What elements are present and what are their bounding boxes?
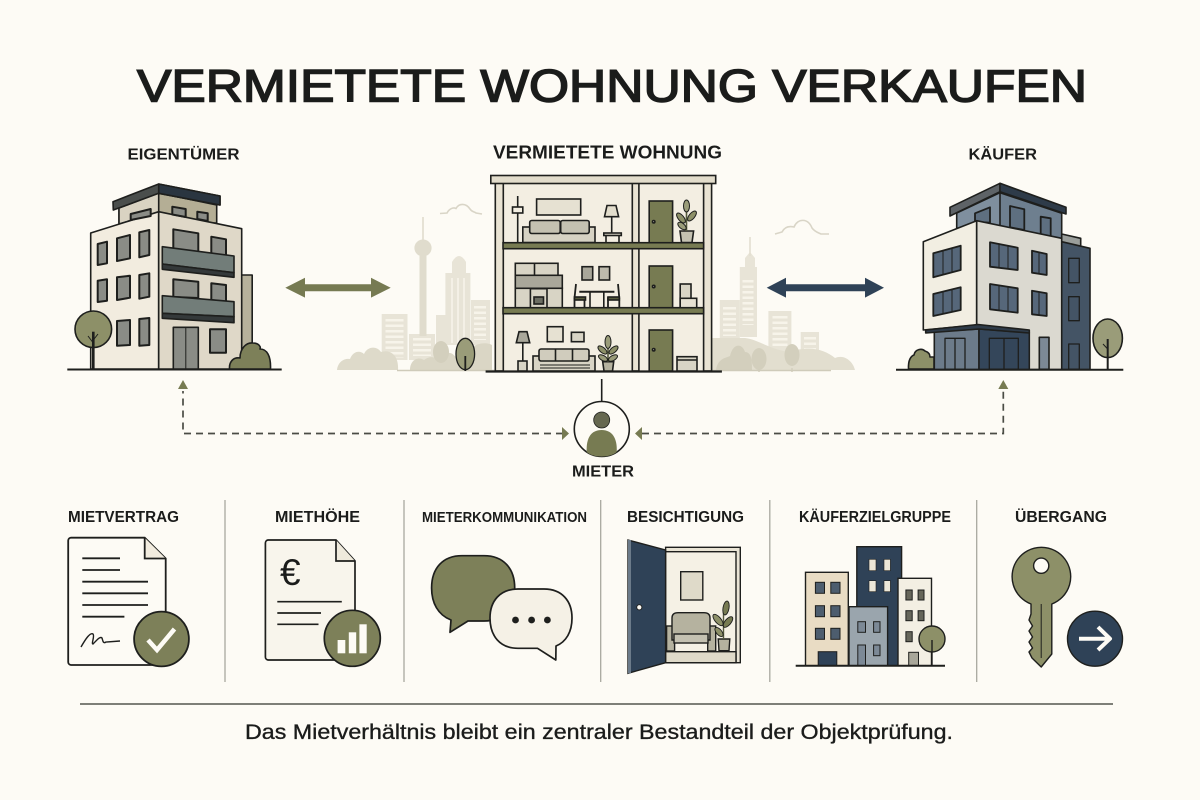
background skyline right [712,237,855,372]
heading: Käufer: KÄUFER [968,146,1037,164]
lower floor furniture [516,327,697,371]
title: VERMIETETE WOHNUNG VERKAUFEN [137,60,1087,112]
icon: rent document: € [280,552,301,593]
icon: open door with living room [628,540,740,673]
background skyline left [337,217,495,370]
central apartment cross-section [486,176,722,372]
panel: Miethöhe [265,509,380,666]
dashed connector: tenant to owner [178,380,569,440]
divider [403,500,405,682]
owner building illustration [67,184,282,370]
divider [976,500,978,682]
divider [224,500,226,682]
cloud right [775,220,829,234]
buyer building illustration [896,183,1123,370]
panel: Mietvertrag: MIETVERTRAG [68,509,179,526]
icon: key with arrow [1012,547,1122,667]
tenant icon [574,379,629,456]
footer statement: Das Mietverhältnis bleibt ein zentraler Bestandteil der Objektprüfung. [245,721,953,744]
small tree next to apartment [456,338,475,371]
panel: Besichtigung: BESICHTIGUNG [627,509,744,526]
panel: Besichtigung [627,509,744,673]
panel: Miethöhe: MIETHÖHE [275,509,360,526]
panel: Mietvertrag [68,509,189,666]
cloud left [440,204,482,214]
arrow: apartment to buyer [767,278,884,298]
divider [769,500,771,682]
label: Mieter: MIETER [572,464,634,480]
panel: Übergang: ÜBERGANG [1015,509,1107,526]
divider [80,703,1113,705]
panel: Mieterkommunikation: MIETERKOMMUNIKATION [422,510,587,526]
heading: Vermietete Wohnung: VERMIETETE WOHNUNG [493,142,722,162]
panel: Mieterkommunikation [422,510,587,660]
heading: Eigentümer: EIGENTÜMER [128,144,240,164]
panel: Käuferzielgruppe [796,509,951,666]
panel: Übergang [1012,509,1122,667]
icon: rent document [265,540,380,666]
dashed connector: tenant to buyer [635,380,1008,440]
icon: speech bubbles [432,556,572,660]
divider [600,500,602,682]
icon: city buildings [796,547,945,666]
panel: Käuferzielgruppe: KÄUFERZIELGRUPPE [799,509,951,526]
middle floor furniture [515,263,697,308]
icon: signed contract [68,538,189,666]
upper floor furniture [512,196,698,243]
arrow: owner to apartment [285,278,391,298]
